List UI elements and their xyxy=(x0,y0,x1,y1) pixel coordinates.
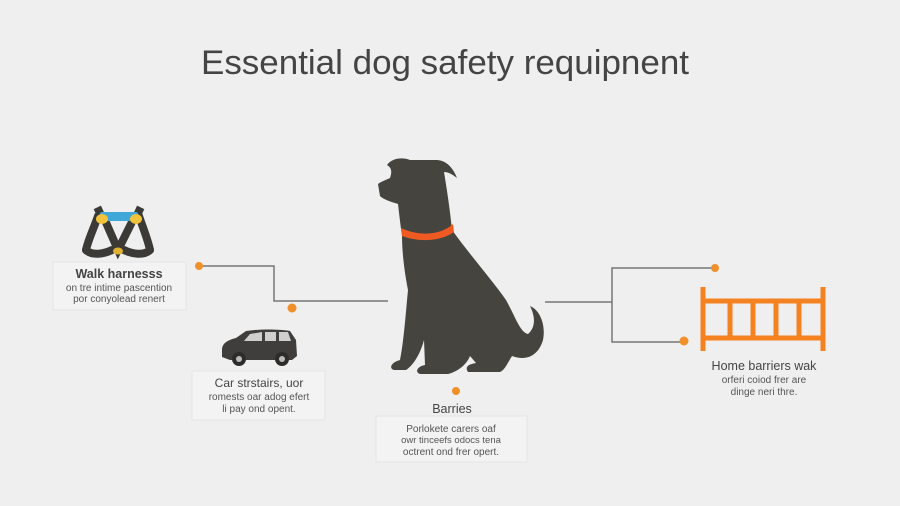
panel: walk harness xyxy=(53,262,186,310)
panel: home barriers xyxy=(712,359,817,398)
panel: car: romests oar adog efert xyxy=(209,392,310,403)
panel: barriers: Barries xyxy=(432,402,472,416)
panel: home barriers: dinge neri thre. xyxy=(731,387,797,398)
panel: barriers: owr tinceefs odocs tena xyxy=(401,435,502,446)
panel: home barriers: Home barriers wak xyxy=(712,359,817,373)
connector lines left xyxy=(199,266,388,301)
panel: car xyxy=(192,371,325,420)
panel: walk harness: Walk harnesss xyxy=(75,267,163,281)
panel: walk harness: por conyolead renert xyxy=(73,294,165,305)
dog silhouette xyxy=(378,158,544,374)
icon: harness xyxy=(86,206,150,254)
panel: barriers: octrent ond frer opert. xyxy=(403,447,499,458)
panel: walk harness: on tre intime pascention xyxy=(66,283,172,294)
panel: car: Car strstairs, uor xyxy=(215,376,303,390)
icon: car xyxy=(222,330,297,366)
icon: gate xyxy=(703,287,823,351)
panel: barriers: Porlokete carers oaf xyxy=(406,424,496,435)
panel: car: li pay ond opent. xyxy=(222,404,296,415)
dots xyxy=(195,262,719,395)
panel: barriers xyxy=(376,402,527,462)
panel: home barriers: orferi coiod frer are xyxy=(722,375,807,386)
connector lines right xyxy=(545,268,715,342)
dog collar xyxy=(401,224,454,240)
title: Essential dog safety requipnent xyxy=(201,44,690,82)
